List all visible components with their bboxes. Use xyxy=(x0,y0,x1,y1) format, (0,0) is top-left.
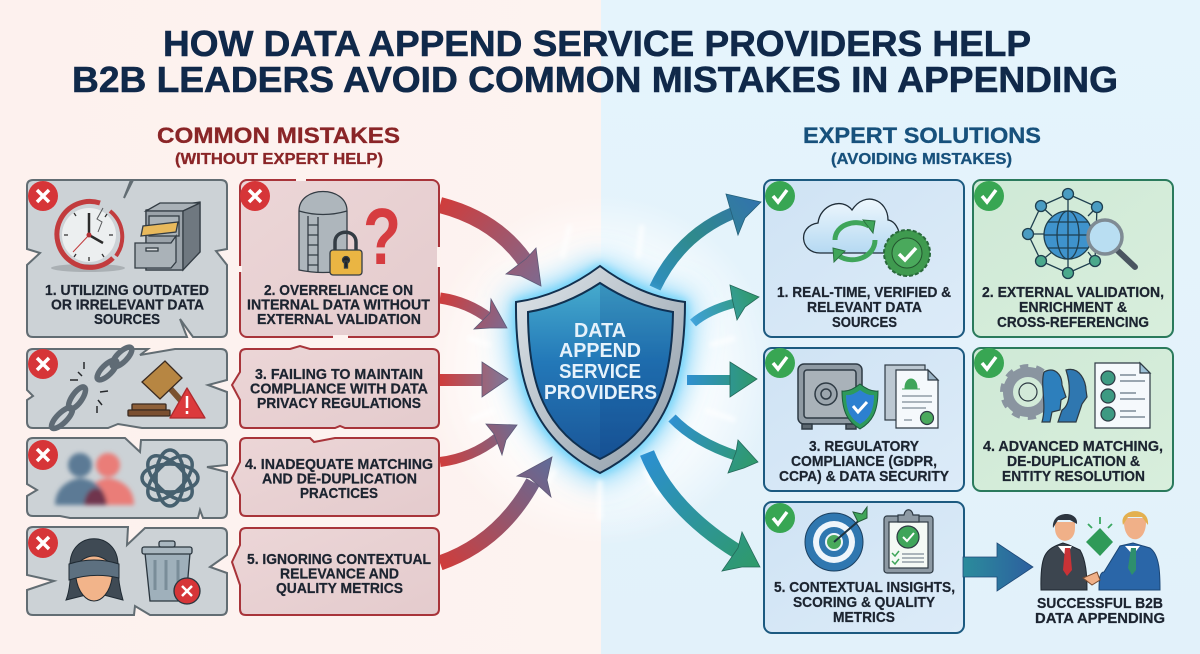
label: successful b2b data appending xyxy=(1035,595,1165,627)
label: mistake 3: 3. FAILING TO MAINTAIN xyxy=(255,366,423,383)
icon: globe network with magnifier xyxy=(1022,188,1135,278)
label: mistake 5 xyxy=(247,551,431,597)
panel: solution 5 xyxy=(764,502,964,633)
label: mistake 2: INTERNAL DATA WITHOUT xyxy=(247,296,430,314)
label: solution 5: 5. CONTEXTUAL INSIGHTS, xyxy=(774,579,955,596)
icon: gavel and warning triangle xyxy=(128,361,205,418)
arrow: shield to solution 2 xyxy=(693,285,759,323)
label: mistake 3 xyxy=(250,366,428,412)
icon: cloud with sync arrows and badge xyxy=(804,199,930,276)
label: mistake 4: PRACTICES xyxy=(300,485,378,502)
icon: clipboard checklist xyxy=(884,510,933,573)
label: solution 3: 3. REGULATORY xyxy=(809,438,919,455)
green check badges xyxy=(765,181,1004,533)
icon: safe xyxy=(798,364,862,429)
arrow: shield to solution 4 xyxy=(672,418,758,473)
icon: broken chain xyxy=(49,344,135,431)
title xyxy=(72,23,1118,100)
label: mistake 4 xyxy=(245,456,433,502)
heading: common mistakes xyxy=(157,123,400,168)
label: solution 3: COMPLIANCE (GDPR, xyxy=(791,453,937,470)
panel: mistake 4 text xyxy=(232,438,439,516)
label: solution 5 xyxy=(774,579,955,626)
panel: mistake 3 xyxy=(27,344,227,431)
panel: mistake 5 xyxy=(27,527,227,615)
title: B2B LEADERS AVOID COMMON MISTAKES IN APPENDING xyxy=(72,59,1118,100)
label: solution 5: SCORING & QUALITY xyxy=(793,594,935,611)
label: mistake 1 xyxy=(45,282,209,328)
panel: mistake 3 text xyxy=(232,346,439,428)
central shield: data append service providers: SERVICE xyxy=(559,360,641,383)
panel: mistake 2 xyxy=(240,179,439,337)
label: solution 2: 2. EXTERNAL VALIDATION, xyxy=(982,284,1164,301)
label: mistake 4: AND DE-DUPLICATION xyxy=(262,470,417,488)
label: solution 2 xyxy=(982,284,1164,331)
icon: gear with head profiles xyxy=(1003,367,1087,422)
label: successful b2b data appending: SUCCESSFUL B2B xyxy=(1037,595,1163,612)
icon: blurred duplicate people xyxy=(55,453,134,505)
label: mistake 2: EXTERNAL VALIDATION xyxy=(257,311,421,328)
label: mistake 1: OR IRRELEVANT DATA xyxy=(51,296,204,314)
icon: trash can with x xyxy=(142,541,200,604)
panel: solution 1 xyxy=(764,180,964,337)
label: mistake 2 xyxy=(247,282,430,328)
title: HOW DATA APPEND SERVICE PROVIDERS HELP xyxy=(163,23,1031,64)
icon: blue shield xyxy=(842,384,878,429)
panel: mistake 1 xyxy=(27,180,227,337)
central shield: data append service providers xyxy=(516,266,685,473)
arrow: mistake 2 to shield xyxy=(440,298,507,329)
arrow: shield to solution 3 xyxy=(687,362,757,397)
label: mistake 5: RELEVANCE AND xyxy=(280,566,399,582)
label: solution 1: 1. REAL-TIME, VERIFIED & xyxy=(777,284,951,301)
label: solution 2: ENRICHMENT & xyxy=(1019,299,1127,316)
arrow: shield to solution 1 xyxy=(655,194,761,288)
panel: solution 4 xyxy=(973,348,1173,491)
label: mistake 2: 2. OVERRELIANCE ON xyxy=(264,282,413,299)
label: mistake 3: COMPLIANCE WITH DATA xyxy=(250,380,428,398)
icon: tangled knot xyxy=(140,448,200,508)
heading: common mistakes: COMMON MISTAKES xyxy=(157,123,400,148)
red x badges xyxy=(28,181,270,558)
central shield: data append service providers: APPEND xyxy=(559,339,641,362)
icon: profile list document xyxy=(1095,363,1150,428)
central shield: data append service providers: PROVIDERS xyxy=(544,381,657,404)
label: solution 4: ENTITY RESOLUTION xyxy=(1002,468,1145,485)
label: mistake 3: PRIVACY REGULATIONS xyxy=(257,395,421,412)
central glow xyxy=(425,195,775,545)
arrow: shield to solution 5 xyxy=(647,453,760,571)
label: solution 1: RELEVANT DATA xyxy=(807,299,922,316)
heading: expert solutions xyxy=(803,123,1041,168)
arrow: mistake 3 to shield xyxy=(440,362,508,397)
arrow: mistake 5 to shield xyxy=(440,457,552,563)
panel: solution 3 xyxy=(764,348,964,491)
label: solution 2: CROSS-REFERENCING xyxy=(997,314,1149,331)
arrow: mistake 1 to shield xyxy=(440,205,541,286)
heading: common mistakes: (WITHOUT EXPERT HELP) xyxy=(175,151,383,168)
label: solution 1: SOURCES xyxy=(832,314,897,331)
label: solution 4: 4. ADVANCED MATCHING, xyxy=(983,438,1163,455)
label: solution 5: METRICS xyxy=(833,609,895,626)
label: mistake 1: 1. UTILIZING OUTDATED xyxy=(45,282,209,299)
panel: solution 2 xyxy=(973,180,1173,337)
heading: expert solutions: (AVOIDING MISTAKES) xyxy=(831,151,1012,168)
label: solution 4: DE-DUPLICATION & xyxy=(1007,453,1140,470)
label: mistake 1: SOURCES xyxy=(94,311,160,328)
icon: broken clock xyxy=(51,201,125,272)
label: solution 1 xyxy=(777,284,951,331)
icon: document stack xyxy=(885,365,938,428)
label: mistake 5: 5. IGNORING CONTEXTUAL xyxy=(247,551,431,568)
label: successful b2b data appending: DATA APPENDING xyxy=(1035,610,1165,627)
icon: target with dart xyxy=(805,507,867,571)
icon: filing cabinet xyxy=(135,202,200,270)
label: mistake 5: QUALITY METRICS xyxy=(276,580,403,597)
label: solution 3: CCPA) & DATA SECURITY xyxy=(779,468,949,485)
icon: data silo with padlock xyxy=(299,192,362,275)
panel: mistake 5 text xyxy=(232,528,439,615)
central shield: data append service providers: DATA xyxy=(574,319,626,342)
arrow: mistake 4 to shield xyxy=(440,424,517,462)
heading: expert solutions: EXPERT SOLUTIONS xyxy=(803,123,1041,148)
label: solution 4 xyxy=(983,438,1163,485)
icon: question mark: ? xyxy=(363,192,401,281)
icon: blindfolded person xyxy=(66,539,123,601)
arrow: solution 5 to outcome xyxy=(963,543,1033,591)
panel: mistake 4 xyxy=(27,438,227,518)
label: solution 3 xyxy=(779,438,949,485)
label: mistake 4: 4. INADEQUATE MATCHING xyxy=(245,456,433,473)
icon: business handshake xyxy=(1041,511,1160,590)
